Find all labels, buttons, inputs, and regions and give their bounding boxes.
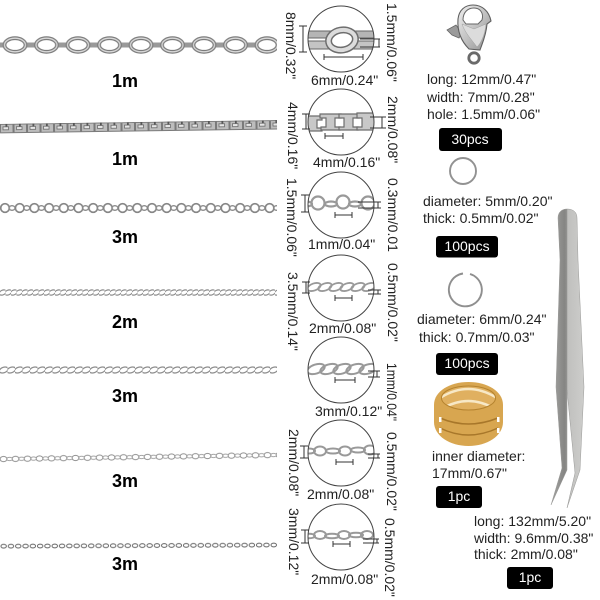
bottom size 2mm: 2mm/0.08" <box>309 320 376 336</box>
detail 2: magnified box chain with dimensions <box>285 89 401 170</box>
right size 1.5mm: 1.5mm/0.06" <box>384 3 400 82</box>
length label 3m: 3m <box>112 554 138 574</box>
spec: opener inner diameter: 17mm/0.67" <box>432 465 507 481</box>
length label 3m: 3m <box>112 227 138 247</box>
spec: tweezers dimensions <box>473 513 593 562</box>
right size 0.5mm: 0.5mm/0.02" <box>384 432 400 511</box>
badge: 100pcs: 100pcs <box>444 355 490 371</box>
icon: lobster clasp <box>447 5 491 63</box>
icon: 6mm jump ring <box>449 274 482 306</box>
length label 1m: 1m <box>112 71 138 91</box>
left size 4mm: 4mm/0.16" <box>285 102 301 169</box>
left size 2mm: 2mm/0.08" <box>286 429 302 496</box>
bottom size 1mm: 1mm/0.04" <box>308 236 375 252</box>
spec: clasp dimensions: hole: 1.5mm/0.06" <box>427 106 540 122</box>
chain 3: rolo chain <box>0 201 277 215</box>
badge: 100pcs: 100pcs <box>444 238 490 254</box>
length label 1m: 1m <box>112 149 138 169</box>
detail 4: magnified fine curb chain with dimensions <box>285 255 401 351</box>
bottom size 4mm: 4mm/0.16" <box>313 154 380 170</box>
badge: 1pc <box>436 486 482 508</box>
badge: 100pcs <box>436 236 498 258</box>
bottom size 6mm: 6mm/0.24" <box>311 72 378 88</box>
length label 2m: 2m <box>112 312 138 332</box>
spec: tweezers dimensions: long: 132mm/5.20" <box>474 513 591 529</box>
chain 6: thin cable chain <box>0 451 277 465</box>
chain 1: cable chain <box>0 33 277 57</box>
detail 5: magnified curb chain with dimensions <box>306 337 400 421</box>
bottom size 2mm: 2mm/0.08" <box>311 571 378 587</box>
right size 0.5mm: 0.5mm/0.02" <box>385 263 401 342</box>
chain 2: box chain <box>0 120 277 135</box>
chain 7: finest cable chain <box>0 540 277 551</box>
left size 8mm: 8mm/0.32" <box>283 12 299 79</box>
badge: 1pc: 1pc <box>448 488 470 504</box>
right size 1mm: 1mm/0.04" <box>384 363 400 421</box>
right size 2mm: 2mm/0.08" <box>385 96 401 163</box>
badge: 30pcs <box>439 128 502 151</box>
badge: 30pcs: 30pcs <box>451 131 489 147</box>
detail 6: magnified cable chain with dimensions <box>286 420 400 511</box>
badge: 1pc <box>507 567 553 589</box>
detail 7: magnified fine cable chain with dimensions <box>286 504 398 597</box>
length label 3m: 3m <box>112 386 138 406</box>
spec: 5mm jump ring dimensions: thick: 0.5mm/0.02" <box>423 210 538 226</box>
spec: 6mm jump ring dimensions: thick: 0.7mm/0.03" <box>419 329 534 345</box>
detail 3: magnified rolo chain with dimensions <box>284 172 401 257</box>
badge: 100pcs <box>436 353 498 375</box>
spec: tweezers dimensions: thick: 2mm/0.08" <box>474 546 578 562</box>
bottom size 3mm: 3mm/0.12" <box>315 403 382 419</box>
spec: 6mm jump ring dimensions: diameter: 6mm/0.24" <box>417 311 546 327</box>
left size 3mm: 3mm/0.12" <box>286 508 302 575</box>
spec: 5mm jump ring dimensions <box>423 193 552 226</box>
icon: tweezers <box>551 209 584 508</box>
spec: 5mm jump ring dimensions: diameter: 5mm/0.20" <box>423 193 552 209</box>
spec: opener inner diameter: inner diameter: <box>432 448 525 464</box>
icon: 5mm jump ring <box>450 158 476 184</box>
left size 3.5mm: 3.5mm/0.14" <box>285 272 301 351</box>
spec: clasp dimensions <box>426 71 540 122</box>
chain 5: curb chain <box>0 366 277 374</box>
length label 3m: 3m <box>112 471 138 491</box>
badge: 1pc: 1pc <box>519 569 541 585</box>
right size 0.5mm: 0.5mm/0.02" <box>382 518 398 597</box>
spec: 6mm jump ring dimensions <box>417 311 546 345</box>
spec: opener inner diameter <box>432 448 525 481</box>
spec: clasp dimensions: long: 12mm/0.47" <box>427 71 536 87</box>
left size 1.5mm: 1.5mm/0.06" <box>284 178 300 257</box>
bottom size 2mm: 2mm/0.08" <box>307 486 374 502</box>
chain 4: fine curb chain <box>0 289 277 296</box>
detail 1: magnified cable chain with dimensions <box>283 3 400 88</box>
spec: tweezers dimensions: width: 9.6mm/0.38" <box>473 530 593 546</box>
right size 0.3mm: 0.3mm/0.01 <box>385 178 401 252</box>
spec: clasp dimensions: width: 7mm/0.28" <box>426 89 535 105</box>
icon: gold jump ring opener <box>434 382 503 446</box>
